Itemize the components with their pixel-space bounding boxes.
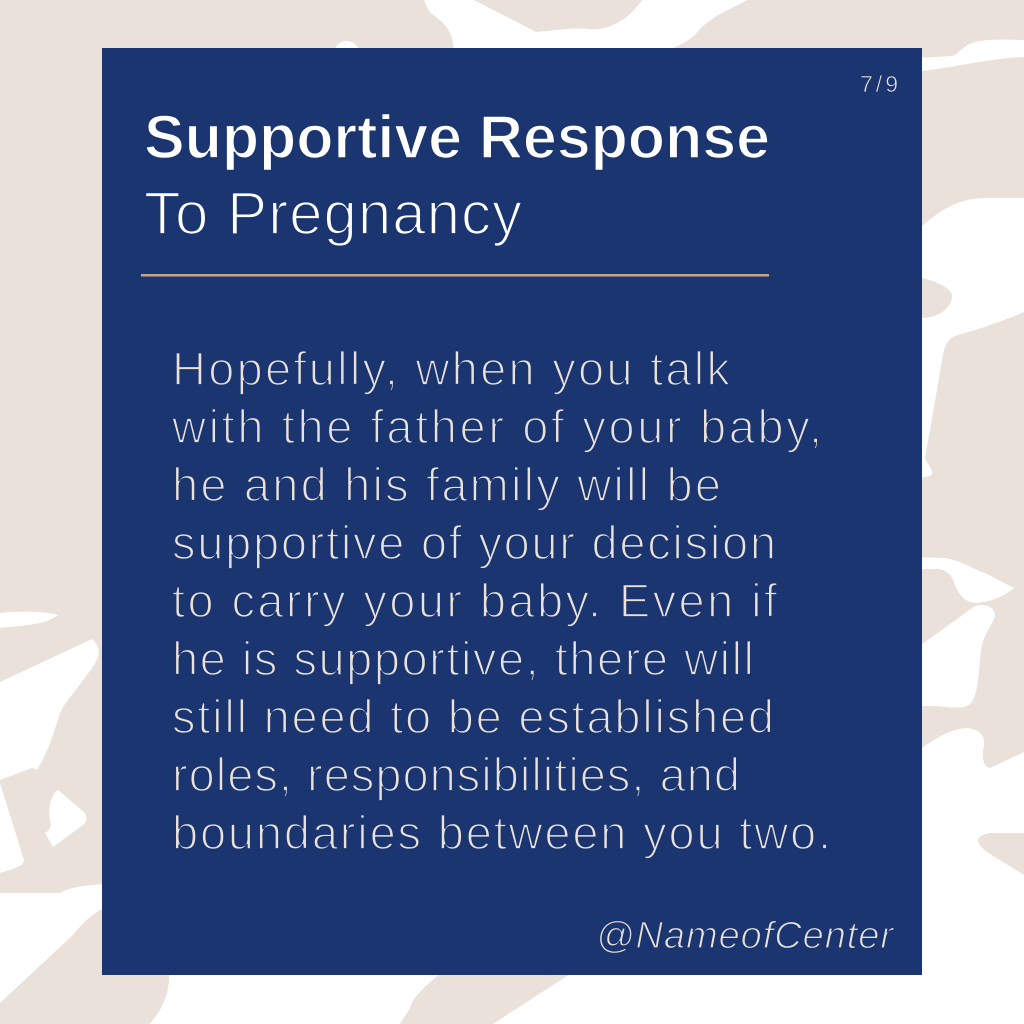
body text: roles, responsibilities, and (172, 748, 740, 801)
title: Supportive Response (144, 103, 770, 171)
body text: still need to be established (172, 690, 774, 743)
body text: to carry your baby. Even if (172, 574, 778, 627)
body text: he and his family will be (172, 458, 721, 511)
divider rule (141, 274, 769, 276)
body text: boundaries between you two. (172, 806, 831, 859)
title: To Pregnancy (144, 180, 522, 247)
title (144, 103, 770, 247)
panel: navy card (102, 48, 922, 975)
body text: he is supportive, there will (172, 632, 754, 685)
body text: Hopefully, when you talk (172, 342, 730, 395)
beige strips over the white lower area (0, 833, 1024, 1024)
page number: 7/9 (860, 71, 898, 97)
social handle: @NameofCenter (596, 915, 894, 957)
body text (171, 342, 831, 859)
body text: supportive of your decision (172, 516, 776, 569)
body text: with the father of your baby, (171, 400, 822, 453)
